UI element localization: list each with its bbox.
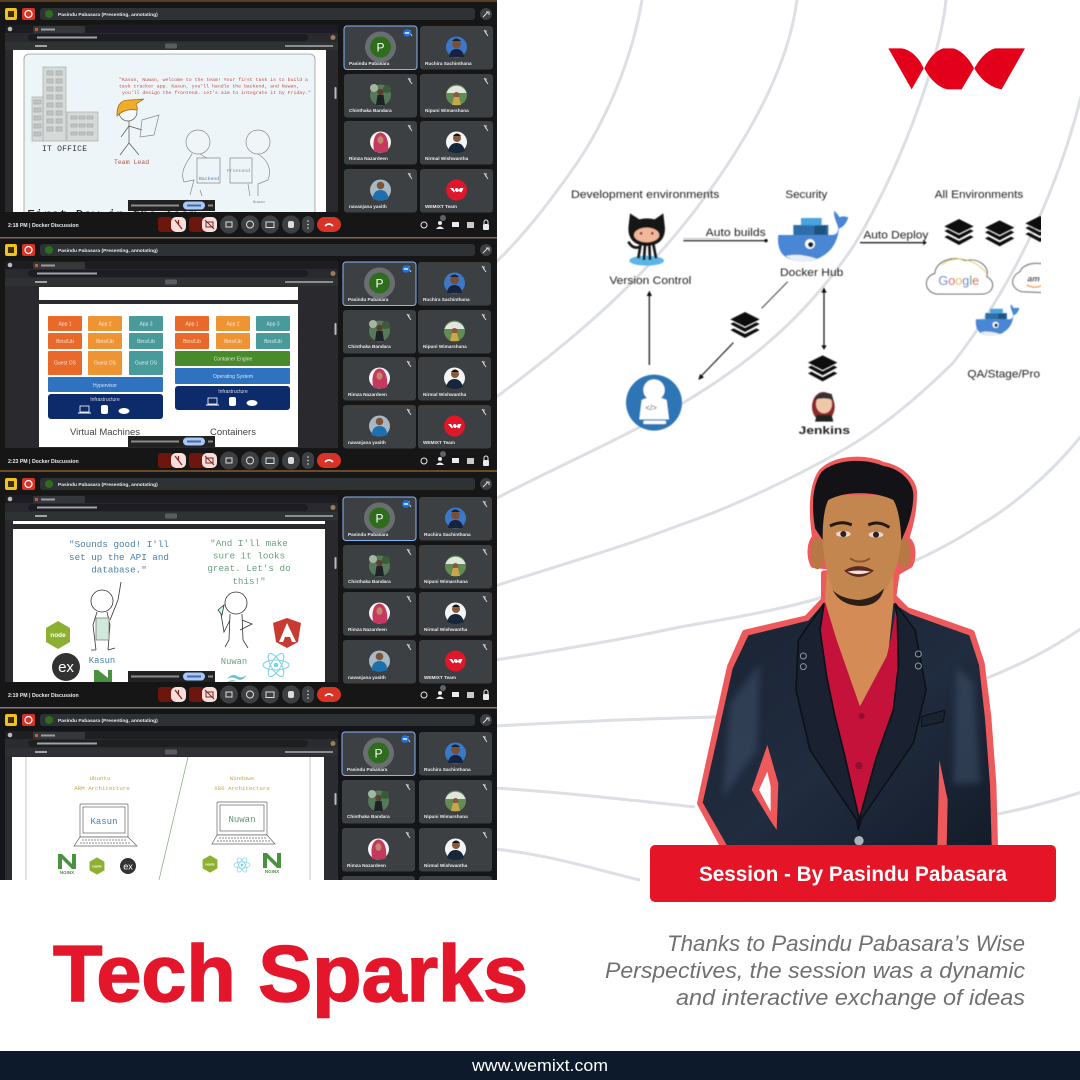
- speech: team lead: "Kasun, Nuwan, welcome to the team! Your first task is to build a: [119, 77, 308, 83]
- speech: nuwan: sure it looks: [213, 550, 285, 562]
- speech: kasun: set up the API and: [69, 552, 169, 563]
- label: QA stage pro: QA/Stage/Pro: [967, 368, 1040, 380]
- diagram: virtual machines stack: Hypervisor: [93, 383, 117, 389]
- tile: wemixt: WEMIXT Team: [425, 204, 457, 209]
- slide: kasun and nuwan: [13, 521, 325, 682]
- jacket pocket and buttons: [854, 710, 945, 845]
- icon: tailwind: [227, 675, 247, 682]
- tile: chinthaka: Chinthaka Bandara: [347, 814, 390, 819]
- title: Tech Sparks: [53, 929, 528, 1018]
- label: it office: IT OFFICE: [42, 145, 87, 154]
- hair: [813, 461, 913, 541]
- meet frame 2 with chrome and tiles: 2:23 PM | Docker Discussion: [8, 459, 79, 465]
- label: windows x86: [214, 775, 270, 792]
- label: ubuntu arm: ARM Architecture: [74, 785, 130, 792]
- icon: jenkins: [812, 392, 835, 422]
- slide heading: First Day in the Team: [27, 209, 197, 224]
- meet frame 2 with chrome and tiles: [0, 236, 497, 473]
- diagram: containers stack: Operating System: [213, 374, 253, 380]
- tile: nipuni: [420, 74, 493, 118]
- red cut-out outline: body: [700, 573, 995, 847]
- tile: nipuni: Nipuni Wimarshana: [424, 579, 468, 584]
- slide: virtual machines vs containers: [39, 287, 298, 447]
- label: kasun: Kasun: [90, 817, 118, 827]
- diagram: virtual machines stack: Bins/Lib: [56, 339, 74, 345]
- label: nuwan: Nuwan: [253, 201, 266, 205]
- tile: nirmal: Nirmal Wishwantha: [424, 627, 468, 632]
- meet frame 4 with chrome and tiles: [0, 708, 497, 880]
- tile: chinthaka: [343, 310, 416, 354]
- ears: [811, 537, 911, 569]
- label: team lead: Team Lead: [114, 159, 149, 166]
- arrow: docker hub to image stack: [762, 282, 788, 308]
- presenter portrait: [700, 460, 995, 847]
- icon: express: [52, 653, 80, 681]
- arrow: auto deploy: Auto Deploy: [863, 229, 929, 241]
- tile: pasindu: Pasindu Pabasara: [348, 297, 389, 302]
- diagram: containers stack: Bins/Lib: [183, 339, 201, 345]
- illustration: nuwan laptop: [212, 802, 275, 844]
- docker CI/CD diagram: [571, 189, 1055, 437]
- illustration: team lead: [117, 99, 159, 155]
- tile: ruchira: [419, 497, 492, 540]
- tile: nipuni: [419, 545, 492, 588]
- tile: pasindu: [344, 26, 417, 70]
- tile: pasindu: Pasindu Pabasara: [348, 532, 389, 537]
- speech: kasun: [69, 539, 169, 576]
- label: ubuntu arm: [74, 775, 130, 792]
- tile: navanjana: navanjana yasith: [349, 204, 387, 209]
- tile: pasindu: [343, 497, 416, 540]
- tile: ruchira: [419, 732, 492, 776]
- tile: ruchira: [418, 262, 491, 306]
- tile: navanjana: [343, 405, 416, 448]
- tile: nirmal: Nirmal Wishwantha: [424, 863, 468, 868]
- nose and mouth: [844, 558, 874, 577]
- neck and chest: [825, 573, 893, 707]
- tile: navanjana: navanjana yasith: [348, 440, 386, 445]
- arm gaps: [752, 745, 948, 847]
- suit jacket: [703, 603, 992, 845]
- tile: ruchira: Ruchira Sachinthana: [424, 532, 471, 537]
- icons: kasun stack: NGINX: [60, 870, 74, 875]
- label: windows x86: X86 Architecture: [214, 785, 270, 792]
- tile: nipuni: Nipuni Wimarshana: [423, 344, 467, 349]
- label: version control: Version Control: [609, 275, 691, 287]
- tile: ruchira: Ruchira Sachinthana: [423, 297, 470, 302]
- meet frame 4 with chrome and tiles: Pasindu Pabasara (Presenting, annotating): [58, 718, 158, 724]
- panel: meet screenshot 1: [0, 0, 497, 237]
- label: kasun: Kasun: [89, 656, 115, 666]
- tile: rimza: [343, 592, 416, 636]
- icon: github octocat: [628, 213, 665, 266]
- panel: meet screenshot 4: [0, 708, 497, 880]
- description text: [605, 931, 1025, 1010]
- diagram: virtual machines stack: [48, 316, 163, 419]
- diagram: containers stack: App 2: [226, 322, 240, 328]
- diagram: virtual machines stack: Guest OS: [94, 360, 117, 366]
- tile: nirmal: [419, 828, 492, 872]
- background curved lines: [490, 0, 1080, 880]
- tile: rimza: Rimza Nazardeen: [349, 156, 388, 161]
- illustration: two colleagues with puzzle: [183, 130, 270, 196]
- icon: amazon cloud: [1013, 263, 1047, 293]
- speech: nuwan: "And I'll make: [210, 538, 288, 549]
- tile: chinthaka: [344, 74, 417, 118]
- icon: amazon cloud: am: [1027, 274, 1040, 284]
- diagram: containers stack: App 1: [185, 322, 199, 328]
- tile: nipuni: [418, 310, 491, 354]
- tile: chinthaka: Chinthaka Bandara: [349, 108, 392, 113]
- icon: express: ex: [58, 659, 74, 676]
- label: containers: Containers: [210, 427, 256, 438]
- meet frame 3 with chrome and tiles: Pasindu Pabasara (Presenting, annotating): [58, 482, 158, 488]
- diagram heading: development environments: Development environments: [571, 189, 719, 201]
- red cut-out outline: head: [811, 460, 914, 573]
- illustration: nuwan figure: [218, 592, 252, 648]
- lapels: [796, 603, 926, 830]
- tile: nirmal: [418, 357, 491, 400]
- banner text: Session - By Pasindu Pabasara: [699, 863, 1007, 886]
- arrow: auto builds: [683, 227, 768, 242]
- sharing toast: [128, 200, 215, 211]
- arrow: developer to version control: [647, 291, 652, 365]
- footer bar: [0, 1051, 1080, 1080]
- arrow: image stack to developer: [698, 343, 733, 380]
- screenshot separator lines: [0, 0, 497, 708]
- tile: chinthaka: [342, 780, 415, 824]
- tile: nipuni: [419, 780, 492, 824]
- label: frontend: Frontend: [227, 168, 250, 174]
- icon: angular: [273, 618, 301, 648]
- participants grid: [344, 26, 493, 212]
- diagram: virtual machines stack: Guest OS: [135, 360, 158, 366]
- diagram heading: all environments: All Environments: [935, 189, 1023, 201]
- description text: Perspectives, the session was a dynamic: [605, 958, 1025, 983]
- label: docker hub: Docker Hub: [780, 267, 843, 279]
- tile: rimza: Rimza Nazardeen: [348, 627, 387, 632]
- icon: google cloud: [926, 259, 993, 294]
- description text: and interactive exchange of ideas: [676, 985, 1025, 1010]
- session banner: [650, 845, 1056, 902]
- slide: architecture comparison: [12, 757, 324, 882]
- speech: kasun: database.": [91, 564, 147, 576]
- icon: developer circle: </>: [645, 404, 657, 413]
- illustration: kasun laptop: [74, 804, 137, 846]
- tile: rimza: [343, 357, 416, 400]
- diagram: virtual machines stack: Guest OS: [54, 360, 77, 366]
- arrow: auto deploy: [860, 229, 929, 245]
- icon: image stacks row: [944, 216, 1055, 246]
- icons: kasun stack: ex: [123, 862, 133, 872]
- diagram: virtual machines stack: Bins/Lib: [137, 339, 155, 345]
- label: kasun: Kasun: [186, 200, 199, 204]
- illustration: office building: [32, 67, 98, 141]
- tile: nirmal: Nirmal Wishwantha: [425, 156, 469, 161]
- jacket sheen: [723, 663, 980, 797]
- icon: docker whale: [778, 211, 848, 262]
- tile: pasindu: [343, 262, 416, 306]
- meet title 1: Pasindu Pabasara (Presenting, annotating): [58, 12, 158, 18]
- icon: react: [263, 651, 289, 679]
- speech: nuwan: great. Let's do: [207, 563, 291, 574]
- diagram heading: security: Security: [785, 189, 828, 201]
- eyes and brows: [830, 523, 889, 538]
- label: nuwan: Nuwan: [228, 815, 256, 825]
- tile: chinthaka: Chinthaka Bandara: [348, 344, 391, 349]
- icon: image stack middle: [730, 312, 760, 338]
- diagram: virtual machines stack: App 3: [139, 322, 153, 328]
- panel: meet screenshot 3: [0, 470, 497, 707]
- description text: Thanks to Pasindu Pabasara’s Wise: [667, 931, 1025, 956]
- label: nuwan: Nuwan: [221, 657, 247, 667]
- tile: navanjana: navanjana yasith: [348, 675, 386, 680]
- tile: nirmal: [420, 121, 493, 164]
- label: backend: Backend: [199, 176, 219, 182]
- tile: rimza: [344, 121, 417, 164]
- speech: nuwan: this!": [232, 576, 266, 587]
- icons: nuwan stack: NGINX: [265, 869, 279, 874]
- tile: ruchira: [420, 26, 493, 70]
- tile: nirmal: Nirmal Wishwantha: [423, 392, 467, 397]
- tile: wemixt: WEMIXT Team: [423, 440, 455, 445]
- tile: rimza: [342, 828, 415, 872]
- icons: nuwan stack: [203, 853, 281, 874]
- arrow: docker hub to jenkins: [821, 287, 827, 350]
- tile: wemixt: [418, 405, 491, 448]
- diagram: containers stack: [175, 316, 290, 410]
- sharing toast: [128, 671, 215, 682]
- icon: node: [46, 621, 70, 649]
- icon: image stack jenkins: [808, 355, 837, 381]
- tile: ruchira: Ruchira Sachinthana: [425, 61, 472, 66]
- speech: kasun: "Sounds good! I'll: [69, 539, 169, 550]
- tile: chinthaka: [343, 545, 416, 588]
- meet frame 2 with chrome and tiles: Pasindu Pabasara (Presenting, annotating): [58, 248, 158, 254]
- diagram: virtual machines stack: Bins/Lib: [96, 339, 114, 345]
- lapel pins: [800, 651, 921, 670]
- tile: chinthaka: Chinthaka Bandara: [348, 579, 391, 584]
- meet frame 3 with chrome and tiles: [0, 470, 497, 707]
- diagram: containers stack: Bins/Lib: [264, 339, 282, 345]
- tile: ruchira: Ruchira Sachinthana: [424, 767, 471, 772]
- panel: meet screenshot 2: [0, 236, 497, 473]
- tile: pasindu: [342, 732, 415, 776]
- meet clock 1: 2:18 PM | Docker Discussion: [8, 223, 79, 229]
- tile: nipuni: Nipuni Wimarshana: [424, 814, 468, 819]
- speech: team lead: you'll design the frontend. Let's aim to integrate it by Friday.": [122, 90, 311, 96]
- tile: navanjana: [344, 169, 417, 212]
- icon: developer circle: [626, 375, 682, 431]
- icons: kasun stack: [58, 854, 136, 875]
- beard: [833, 588, 884, 606]
- arrow: auto builds: Auto builds: [706, 227, 766, 239]
- WeMixt logo: [888, 48, 1025, 89]
- tile: wemixt: [420, 169, 493, 212]
- tile: wemixt: WEMIXT Team: [424, 675, 456, 680]
- tile: rimza: Rimza Nazardeen: [347, 863, 386, 868]
- slide: it office: [13, 50, 326, 224]
- tile: nipuni: Nipuni Wimarshana: [425, 108, 469, 113]
- tile: navanjana: [343, 640, 416, 684]
- diagram: virtual machines stack: Infrastructure: [90, 397, 120, 403]
- sharing toast: [128, 436, 215, 447]
- face: [822, 495, 902, 606]
- meet frame 3 with chrome and tiles: 2:19 PM | Docker Discussion: [8, 693, 79, 699]
- tile: pasindu: Pasindu Pabasara: [347, 767, 388, 772]
- diagram: virtual machines stack: App 1: [58, 322, 72, 328]
- icon: google cloud: Google: [938, 274, 979, 288]
- red shirt: [820, 602, 898, 817]
- diagram: containers stack: Infrastructure: [218, 389, 248, 395]
- label: virtual machines: Virtual Machines: [70, 427, 140, 438]
- tile: wemixt: [419, 640, 492, 684]
- website url: www.wemixt.com: [471, 1057, 608, 1075]
- speech: team lead: [119, 77, 311, 96]
- label: windows x86: Windows: [230, 775, 254, 782]
- diagram: containers stack: Bins/Lib: [224, 339, 242, 345]
- label: ubuntu arm: Ubuntu: [90, 775, 110, 782]
- meet window frame 1: [0, 0, 497, 237]
- speech: nuwan: [207, 538, 291, 587]
- tile: rimza: Rimza Nazardeen: [348, 392, 387, 397]
- diagram: containers stack: App 3: [266, 322, 280, 328]
- diagram: containers stack: Container Engine: [214, 356, 253, 362]
- tile: nirmal: [419, 592, 492, 636]
- icon: small docker whale: [976, 304, 1019, 336]
- icon: nginx: [94, 670, 112, 682]
- speech: team lead: task tracker app. Kasun, you'll handle the backend, and Nuwan,: [119, 84, 299, 90]
- tile: pasindu: Pasindu Pabasara: [349, 61, 390, 66]
- illustration: kasun figure: [91, 582, 121, 650]
- diagram: virtual machines stack: App 2: [98, 322, 112, 328]
- label: jenkins: Jenkins: [799, 425, 850, 437]
